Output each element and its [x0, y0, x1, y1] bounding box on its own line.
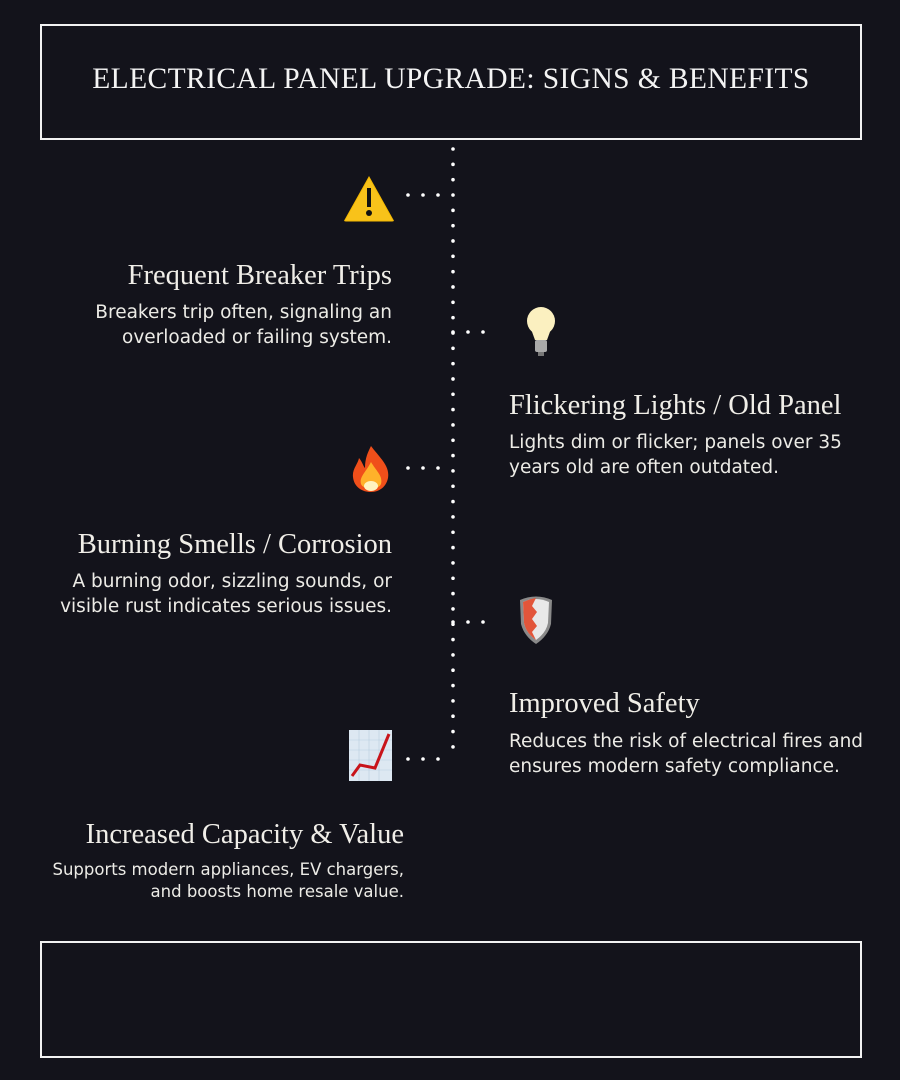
item: improved safety	[509, 688, 863, 777]
title box	[40, 24, 862, 140]
text	[52, 860, 404, 901]
text: Supports modern appliances, EV chargers,	[52, 860, 404, 879]
text	[60, 571, 392, 617]
text: years old are often outdated.	[509, 457, 779, 478]
item: frequent breaker trips	[95, 260, 392, 348]
text: A burning odor, sizzling sounds, or	[72, 571, 392, 592]
text: visible rust indicates serious issues.	[60, 596, 392, 617]
text	[509, 432, 842, 478]
text: overloaded or failing system.	[122, 327, 392, 348]
icon: light bulb	[527, 307, 555, 356]
text: and boosts home resale value.	[151, 882, 404, 901]
heading: Frequent Breaker Trips	[128, 260, 392, 291]
heading: Increased Capacity & Value	[86, 819, 404, 850]
item: burning smells	[60, 529, 392, 617]
icon: shield	[520, 596, 552, 644]
text: Lights dim or flicker; panels over 35	[509, 432, 842, 453]
item: increased capacity	[52, 819, 404, 901]
heading: Improved Safety	[509, 688, 700, 719]
text	[509, 731, 863, 777]
footer box	[40, 941, 862, 1058]
item: flickering lights	[509, 390, 842, 478]
text: Breakers trip often, signaling an	[95, 302, 392, 323]
heading: Burning Smells / Corrosion	[78, 529, 392, 560]
text: ensures modern safety compliance.	[509, 756, 840, 777]
heading: Flickering Lights / Old Panel	[509, 390, 841, 421]
icon: warning	[344, 176, 394, 222]
text	[95, 302, 392, 348]
title: ELECTRICAL PANEL UPGRADE: SIGNS & BENEFITS	[92, 63, 810, 95]
icon: fire	[352, 446, 388, 492]
icon: chart	[349, 730, 392, 781]
text: Reduces the risk of electrical fires and	[509, 731, 863, 752]
